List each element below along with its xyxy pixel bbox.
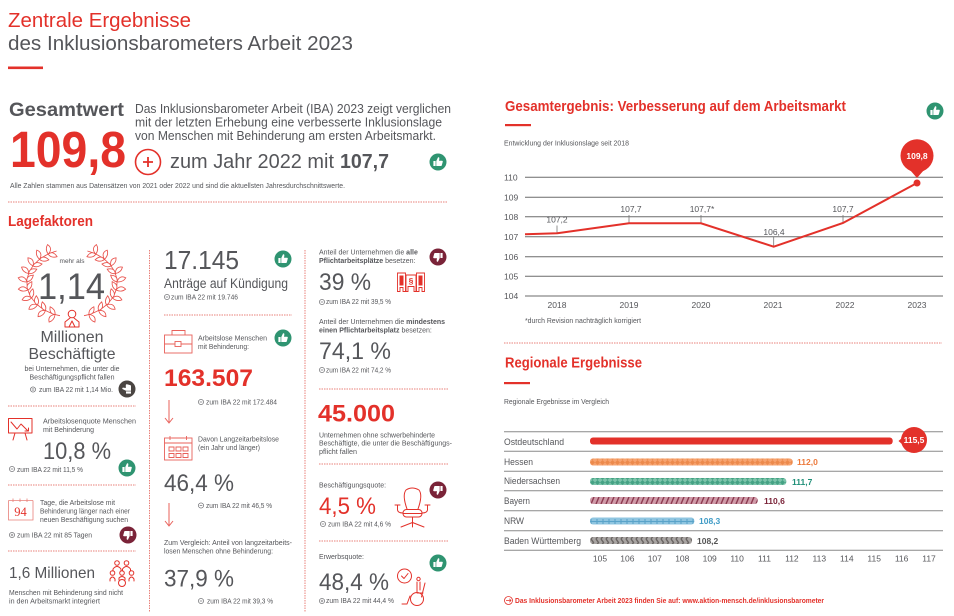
- heading: Gesamtwert: Gesamtwert: [9, 99, 125, 121]
- bar chart: 111: [758, 554, 771, 564]
- bar chart: 116: [895, 554, 909, 564]
- arrow: [165, 503, 173, 526]
- bar chart: 117: [922, 554, 936, 564]
- panel: Arbeitslosenquote: zum IBA 22 mit 11,5 %: [17, 467, 83, 474]
- panel: Pflichtarbeitsplätze: zum IBA 22 mit 39,5 %: [326, 299, 391, 306]
- bar chart: 107: [648, 554, 662, 564]
- panel: Tage: [8, 498, 136, 544]
- panel: Gesamtergebnis: Entwicklung der Inklusionslage seit 2018: [504, 140, 629, 148]
- bar chart: 112,0: [797, 457, 818, 467]
- line chart: 2019: [620, 300, 639, 310]
- callout: 115,5: 115,5: [904, 435, 925, 445]
- panel: 45.000: [318, 400, 453, 456]
- panel: Beschäftigungsquote: zum IBA 22 mit 4,6 %: [328, 522, 391, 528]
- icon: plus circle: [136, 150, 160, 174]
- panel: Pflichtarbeitsplätze: 74,1 %: [319, 338, 391, 365]
- comparison 2022: zum Jahr 2022 mit: [170, 151, 334, 173]
- footer link: Das Inklusionsbarometer Arbeit 2023 finden Sie auf: www.aktion-mensch.de/inklusionsbarometer: [515, 598, 824, 605]
- panel: Erwerbsquote: [319, 554, 446, 606]
- panel: Arbeitslosenquote: mit Behinderung: [43, 427, 94, 434]
- panel: Arbeitslose Menschen: zum IBA 22 mit 39,3 %: [207, 598, 273, 606]
- icon: neutral thumb: [118, 380, 136, 398]
- bar chart: 108: [675, 554, 690, 564]
- panel: Arbeitslose Menschen: zum IBA 22 mit 172.484: [206, 400, 277, 406]
- panel: Arbeitslose Menschen: 46,4 %: [164, 470, 234, 497]
- panel: Pflichtarbeitsplätze: [319, 248, 446, 374]
- panel: Arbeitslosenquote: 10,8 %: [43, 438, 111, 465]
- panel: 1,6 Millionen: [9, 561, 134, 606]
- bar chart: Hessen: [504, 457, 533, 467]
- bar chart: 106: [620, 554, 635, 564]
- bar chart: 109: [703, 554, 717, 564]
- line chart: 105: [504, 272, 518, 282]
- panel: Arbeitslosenquote: [8, 418, 136, 476]
- bar chart: 110,6: [764, 496, 785, 506]
- panel: Gesamtergebnis: *durch Revision nachträglich korrigiert: [525, 318, 641, 325]
- line chart: 107,7: [832, 204, 854, 214]
- heading: Gesamtergebnis: Verbesserung auf dem Arbeitsmarkt: [505, 98, 846, 115]
- panel: Arbeitslose Menschen: Zum Vergleich: Anteil von langzeitarbeits-: [164, 540, 293, 547]
- panel: Beschäftigte: bei Unternehmen, die unter die: [24, 366, 120, 373]
- panel: Tage: Tage, die Arbeitslose mit: [40, 500, 115, 507]
- line chart: 2023: [908, 300, 927, 310]
- panel: Arbeitslose Menschen: Davon Langzeitarbeitslose: [198, 436, 279, 444]
- panel: Beschäftigte: zum IBA 22 mit 1,14 Mio.: [39, 387, 113, 394]
- line chart: 109: [504, 192, 518, 202]
- icon: thumb up: [118, 460, 136, 476]
- panel: 1,6 Millionen: Menschen mit Behinderung sind nicht: [9, 590, 123, 597]
- line chart: 107,7*: [690, 204, 715, 214]
- callout: 109,8: [900, 139, 934, 178]
- arrow: [165, 400, 173, 423]
- panel: 45.000: 45.000: [318, 400, 395, 428]
- panel: Arbeitslose Menschen: Arbeitslose Menschen: [198, 336, 267, 342]
- panel: Pflichtarbeitsplätze: Anteil der Unternehmen die mindestens: [319, 319, 445, 326]
- comparison 2022: 107,7: [340, 151, 389, 173]
- bar chart: 111,7: [792, 477, 813, 487]
- bar chart: Bayern: [504, 496, 530, 506]
- icon: presentation chart: [8, 418, 32, 440]
- panel: Anträge auf Kündigung: [164, 247, 292, 302]
- callout: 115,5: [898, 427, 927, 453]
- panel: Beschäftigte: Millionen: [40, 329, 104, 346]
- panel: 1,6 Millionen: 1,6 Millionen: [9, 565, 95, 582]
- panel: 45.000: Beschäftigte, die unter die Beschäftigungs-: [319, 440, 453, 448]
- bar chart: 108,2: [697, 536, 719, 546]
- heading: Lagefaktoren: Lagefaktoren: [8, 214, 93, 230]
- line chart: 2018: [548, 300, 567, 310]
- bar chart: 114: [840, 554, 854, 564]
- panel: 45.000: pflicht fallen: [319, 449, 357, 456]
- panel: Erwerbsquote: zum IBA 22 mit 44,4 %: [326, 598, 394, 605]
- bar chart: 110: [730, 554, 744, 564]
- heading: Regionale Ergebnisse: [505, 354, 642, 372]
- icon: person: [65, 310, 79, 327]
- bar chart: 105: [593, 554, 607, 564]
- panel: 45.000: Unternehmen ohne schwerbehinderte: [319, 432, 435, 440]
- panel: Regionale Ergebnisse: [504, 354, 943, 564]
- panel: Beschäftigte: Beschäftigungspflicht fallen: [30, 374, 115, 382]
- panel: Gesamtwert: [9, 99, 451, 190]
- text block: intro: Das Inklusionsbarometer Arbeit (IBA) 2023 zeigt verglichen: [135, 102, 451, 116]
- icon: thumb down: [120, 526, 136, 544]
- panel: Arbeitslosenquote: Arbeitslosenquote Menschen: [43, 418, 136, 426]
- line chart: 2021: [764, 300, 783, 310]
- panel: Beschäftigte: [17, 243, 136, 398]
- panel: Beschäftigungsquote: Beschäftigungsquote:: [319, 482, 386, 490]
- icon: laurel wreath: [17, 243, 127, 323]
- line chart: 106: [504, 252, 518, 262]
- line chart: [504, 139, 943, 310]
- line chart: 108: [504, 212, 518, 222]
- line chart: 107: [504, 232, 518, 242]
- panel: Arbeitslose Menschen: mit Behinderung:: [198, 344, 249, 351]
- icon: thumb down: [430, 482, 446, 498]
- panel: Anträge auf Kündigung: Anträge auf Kündigung: [164, 276, 288, 291]
- panel: Anträge auf Kündigung: 17.145: [164, 247, 239, 275]
- panel: Pflichtarbeitsplätze: einen Pflichtarbeitsplatz besetzen:: [319, 328, 432, 334]
- icon: paragraph books: §: [409, 276, 414, 286]
- panel: Arbeitslose Menschen: (ein Jahr und länger): [198, 445, 260, 452]
- panel: Tage: zum IBA 22 mit 85 Tagen: [17, 532, 92, 540]
- panel: Arbeitslose Menschen: 37,9 %: [164, 566, 234, 592]
- line chart: 107,7: [620, 204, 642, 214]
- bar chart: NRW: [504, 516, 524, 526]
- panel: Tage: neuen Beschäftigung suchen: [40, 517, 128, 524]
- panel: Gesamtergebnis: [504, 98, 944, 325]
- icon: wheelchair check: [398, 569, 425, 606]
- panel: Arbeitslose Menschen: zum IBA 22 mit 46,5 %: [206, 503, 272, 510]
- text block: intro: von Menschen mit Behinderung am ersten Arbeitsmarkt.: [135, 129, 436, 143]
- line chart: 104: [504, 291, 518, 301]
- icon: thumb up: [926, 102, 944, 120]
- line chart: 106,4: [763, 227, 785, 237]
- icon: calendar 94: 94: [14, 505, 28, 519]
- panel: Pflichtarbeitsplätze: Pflichtarbeitsplätze besetzen:: [319, 258, 416, 265]
- panel: Beschäftigungsquote: 4,5 %: [319, 493, 376, 520]
- bar chart: 113: [813, 554, 826, 564]
- callout: 109,8: 109,8: [906, 151, 928, 161]
- panel: Erwerbsquote: Erwerbsquote:: [319, 554, 364, 561]
- panel: Tage: Behinderung länger nach einer: [40, 508, 131, 516]
- panel: Arbeitslose Menschen: 163.507: [164, 365, 253, 392]
- panel: Erwerbsquote: 48,4 %: [319, 569, 389, 596]
- bar chart: Niedersachsen: [504, 476, 560, 486]
- bar chart: 108,3: [699, 516, 721, 526]
- bar chart: Baden Württemberg: [504, 536, 581, 546]
- panel: 1,6 Millionen: in den Arbeitsmarkt integriert: [9, 598, 100, 606]
- line chart: 2020: [692, 300, 711, 310]
- panel: Arbeitslose Menschen: losen Menschen ohne Behinderung:: [164, 548, 273, 556]
- bar chart: [504, 427, 943, 564]
- line chart: 110: [504, 172, 518, 182]
- title: [8, 9, 353, 69]
- icon: thumb up: [274, 330, 292, 346]
- icon: thumb up: [430, 554, 446, 572]
- number 1,14: 1,14: [38, 266, 105, 307]
- panel: Beschäftigte: Beschäftigte: [28, 346, 116, 363]
- line chart: 107,2: [546, 214, 568, 224]
- panel: Regionale Ergebnisse: Regionale Ergebnisse im Vergleich: [504, 399, 609, 406]
- panel: Pflichtarbeitsplätze: 39 %: [319, 269, 371, 296]
- icon: thumb up: [430, 154, 446, 170]
- panel: Beschäftigungsquote: [319, 482, 446, 528]
- panel: Anträge auf Kündigung: zum IBA 22 mit 19.746: [171, 294, 238, 302]
- icon: calendar: [164, 436, 192, 460]
- icon: thumb up: [274, 250, 292, 268]
- icon: people group: [110, 561, 134, 586]
- panel: Pflichtarbeitsplätze: zum IBA 22 mit 74,2 %: [326, 368, 391, 374]
- text block: intro: mit der letzten Erhebung eine verbesserte Inklusionslage: [135, 116, 442, 130]
- panel: Beschäftigte: mehr als: [60, 258, 85, 265]
- line chart: 2022: [836, 300, 855, 310]
- big number 109,8: 109,8: [10, 121, 126, 178]
- bar chart: Ostdeutschland: [504, 437, 564, 447]
- icon: thumb down: [430, 248, 446, 266]
- icon: office chair: [395, 488, 430, 527]
- title: Zentrale Ergebnisse: [8, 9, 191, 32]
- title: des Inklusionsbarometers Arbeit 2023: [8, 32, 353, 55]
- note: Alle Zahlen stammen aus Datensätzen von 2021 oder 2022 und sind die aktuellsten Jahresdurchschnittswerte.: [10, 183, 345, 190]
- bar chart: 112: [785, 554, 799, 564]
- panel: Arbeitslose Menschen: [164, 330, 293, 606]
- bar chart: 115: [867, 554, 881, 564]
- icon: briefcase: [164, 330, 192, 353]
- text block: intro: [135, 102, 451, 143]
- panel: Pflichtarbeitsplätze: Anteil der Unternehmen die alle: [319, 250, 418, 256]
